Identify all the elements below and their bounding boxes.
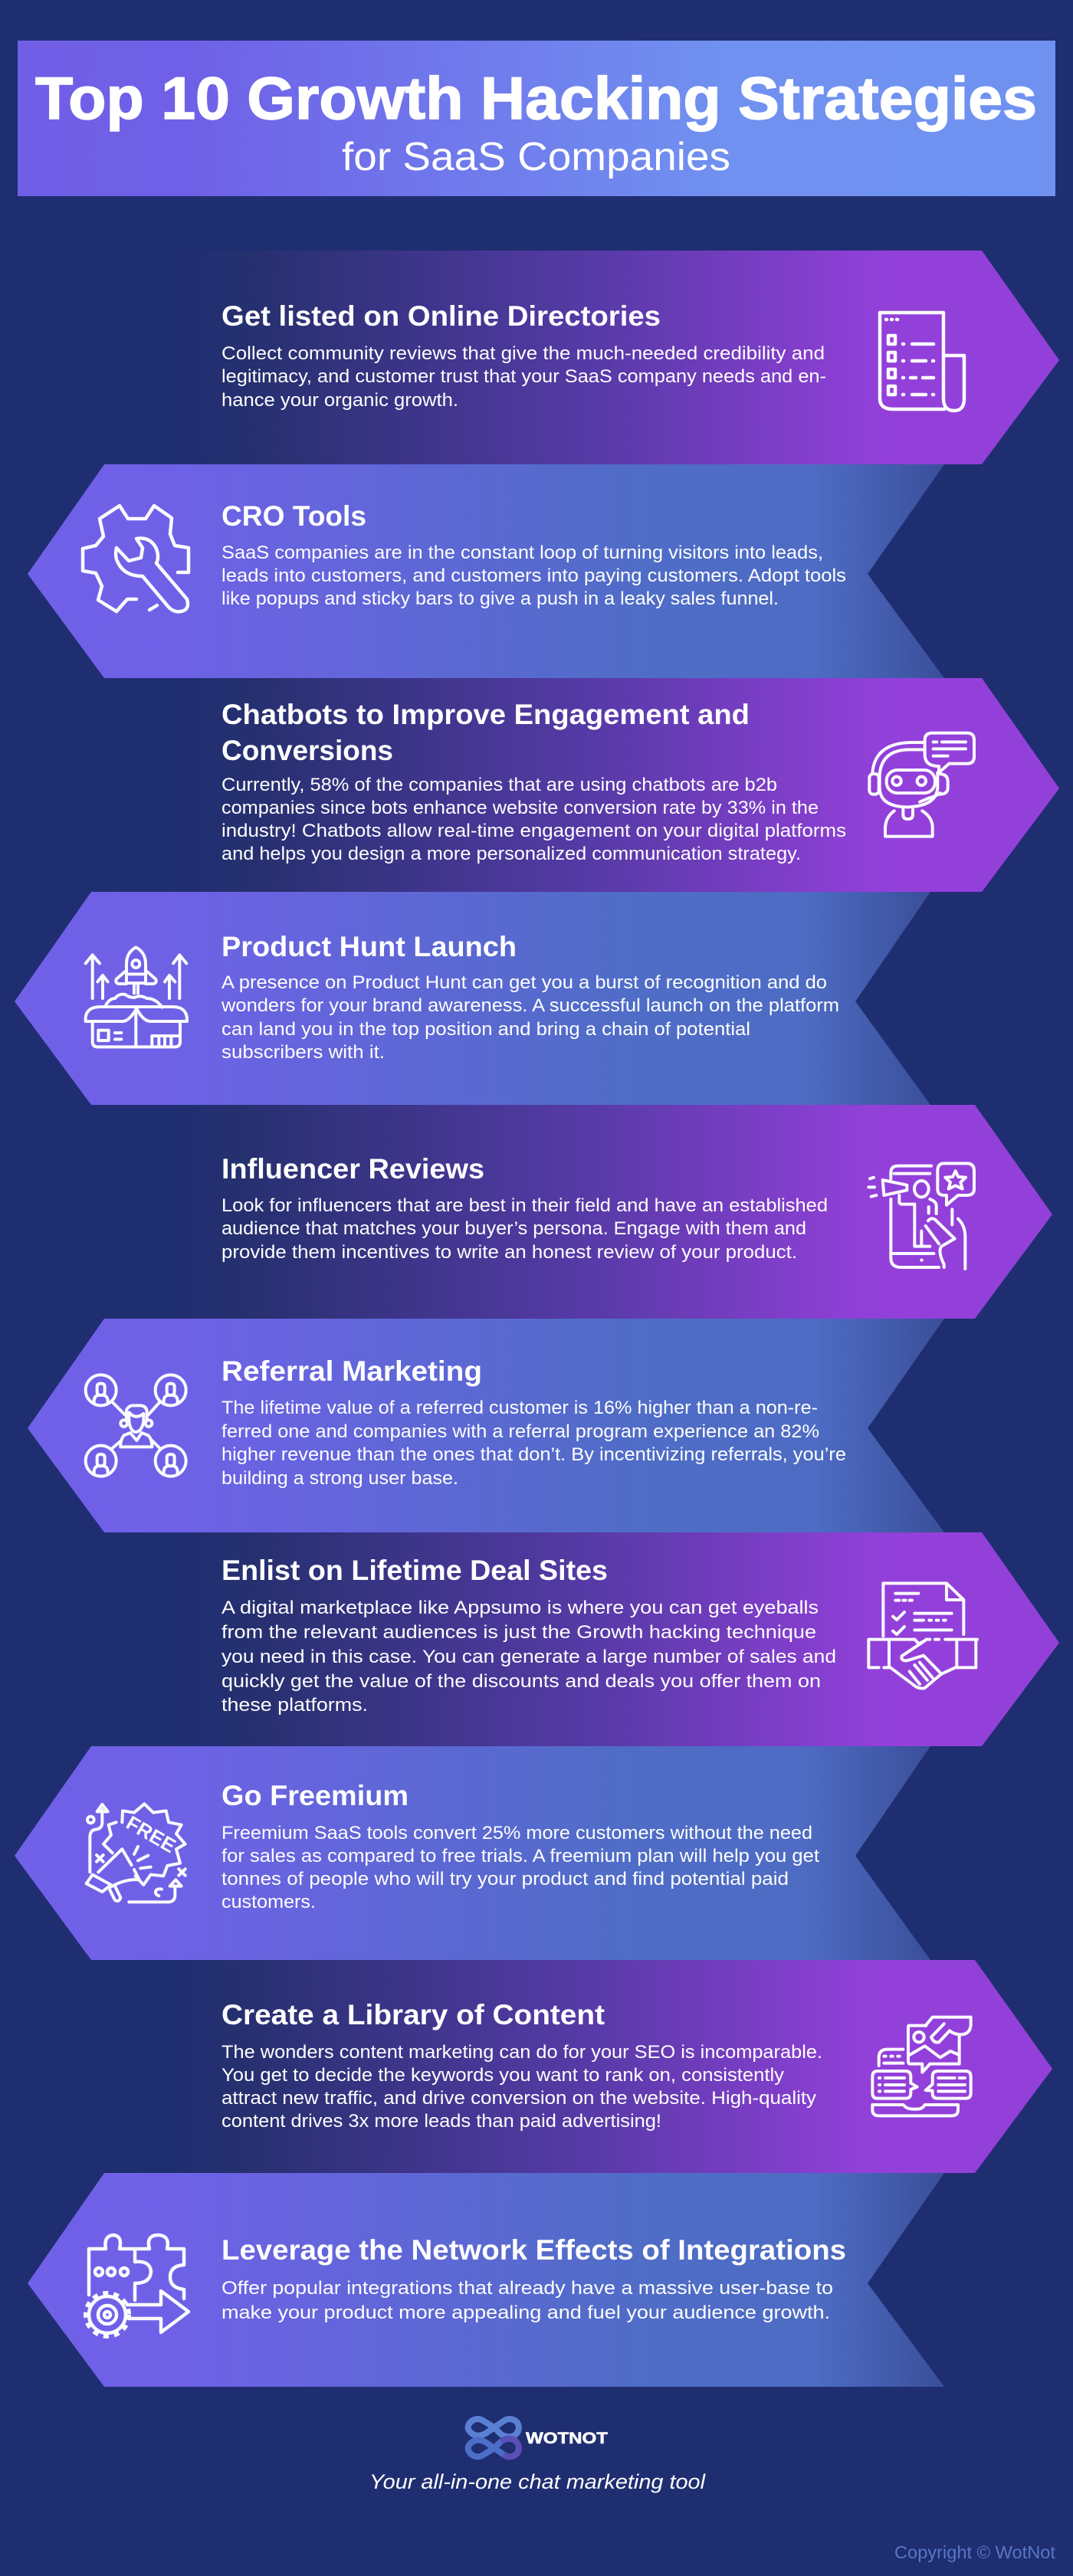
heading: Chatbots to Improve Engagement and <box>221 699 750 730</box>
tagline: Your all-in-one chat marketing tool <box>369 2470 706 2493</box>
body text <box>221 1195 828 1263</box>
body text: ferred one and companies with a referral program experience an 82% <box>221 1421 819 1442</box>
body text: can land you in the top position and bring a chain of potential <box>221 1019 750 1040</box>
heading: Go Freemium <box>221 1780 409 1811</box>
panel: Leverage the Network Effects of Integrations <box>28 2173 944 2387</box>
body text: quickly get the value of the discounts and deals you offer them on <box>221 1671 821 1692</box>
body text: these platforms. <box>221 1695 368 1716</box>
body text: Freemium SaaS tools convert 25% more customers without the need <box>221 1823 812 1844</box>
body text <box>221 1398 846 1489</box>
header banner <box>18 41 1055 196</box>
body text: for sales as compared to free trials. A freemium plan will help you get <box>221 1846 819 1866</box>
body text <box>221 2042 822 2132</box>
body text: you need in this case. You can generate a large number of sales and <box>221 1647 836 1667</box>
body text: Collect community reviews that give the much-needed credibility and <box>221 343 825 364</box>
body text: hance your organic growth. <box>221 390 458 411</box>
icon: contract handshake <box>868 1583 977 1689</box>
body text: building a strong user base. <box>221 1468 458 1489</box>
heading: Conversions <box>221 735 393 766</box>
panel: Product Hunt Launch <box>15 892 930 1105</box>
body text: legitimacy, and customer trust that your SaaS company needs and en- <box>221 366 826 387</box>
icon: free megaphone: FREE <box>123 1811 180 1857</box>
body text: like popups and sticky bars to give a push in a leaky sales funnel. <box>221 588 779 609</box>
body text: tonnes of people who will try your product and find potential paid <box>221 1869 789 1889</box>
icon: puzzle, gear and arrow <box>86 2235 189 2336</box>
body text: make your product more appealing and fuel your audience growth. <box>221 2302 830 2323</box>
body text <box>221 542 846 609</box>
heading: Product Hunt Launch <box>221 931 517 962</box>
body text <box>221 2278 833 2323</box>
panel: Go Freemium <box>15 1746 930 1960</box>
body text: The lifetime value of a referred customer is 16% higher than a non-re- <box>221 1398 818 1418</box>
body text: Look for influencers that are best in their field and have an established <box>221 1195 828 1216</box>
heading: Leverage the Network Effects of Integrations <box>221 2234 846 2266</box>
panel: Influencer Reviews <box>172 1105 1052 1319</box>
panel: Referral Marketing <box>28 1319 944 1532</box>
logo: WotNot <box>468 2419 608 2456</box>
heading: Create a Library of Content <box>221 1999 605 2030</box>
body text: leads into customers, and customers into paying customers. Adopt tools <box>221 565 846 586</box>
heading <box>221 699 750 766</box>
title: Top 10 Growth Hacking Strategies <box>35 64 1037 132</box>
icon: chatbot <box>869 733 974 837</box>
panel: Get listed on Online Directories <box>182 251 1059 464</box>
body text: customers. <box>221 1892 316 1912</box>
body text: provide them incentives to write an honest review of your product. <box>221 1242 797 1263</box>
icon: content library <box>872 2017 971 2116</box>
body text: Offer popular integrations that already have a massive user-base to <box>221 2278 833 2299</box>
body text: and helps you design a more personalized communication strategy. <box>221 844 801 864</box>
body text: The wonders content marketing can do for your SEO is incomparable. <box>221 2042 822 2063</box>
logo: WotNot: WOTNOT <box>526 2430 608 2447</box>
body text: You get to decide the keywords you want to rank on, consistently <box>221 2065 784 2086</box>
body text: companies since bots enhance website conversion rate by 33% in the <box>221 798 819 818</box>
body text <box>221 1598 836 1716</box>
panel: Chatbots <box>182 678 1059 892</box>
heading: Get listed on Online Directories <box>221 300 661 332</box>
body text <box>221 343 826 411</box>
heading: Referral Marketing <box>221 1355 482 1387</box>
icon: directory list <box>880 313 964 411</box>
panel: CRO Tools <box>28 464 944 678</box>
heading: Enlist on Lifetime Deal Sites <box>221 1555 608 1586</box>
panel: Enlist on Lifetime Deal Sites <box>182 1532 1059 1746</box>
body text: Currently, 58% of the companies that are using chatbots are b2b <box>221 775 777 795</box>
body text <box>221 1823 819 1912</box>
icon: referral network <box>86 1375 186 1476</box>
panel: Create a Library of Content <box>172 1960 1052 2173</box>
body text: attract new traffic, and drive conversion on the website. High-quality <box>221 2088 816 2109</box>
body text: from the relevant audiences is just the Growth hacking technique <box>221 1622 816 1643</box>
icon: free megaphone <box>87 1804 185 1902</box>
body text: A digital marketplace like Appsumo is where you can get eyeballs <box>221 1598 819 1618</box>
body text: industry! Chatbots allow real-time engagement on your digital platforms <box>221 821 846 841</box>
body text: content drives 3x more leads than paid advertising! <box>221 2111 661 2132</box>
subtitle: for SaaS Companies <box>342 135 730 179</box>
heading: Influencer Reviews <box>221 1153 484 1185</box>
heading: CRO Tools <box>221 500 366 532</box>
icon: gear and wrench <box>83 506 189 611</box>
body text <box>221 775 846 864</box>
body text: audience that matches your buyer’s persona. Engage with them and <box>221 1218 806 1239</box>
body text: A presence on Product Hunt can get you a burst of recognition and do <box>221 972 827 993</box>
copyright: Copyright © WotNot <box>894 2542 1056 2562</box>
body text <box>221 972 839 1063</box>
body text: wonders for your brand awareness. A successful launch on the platform <box>221 995 839 1016</box>
body text: SaaS companies are in the constant loop of turning visitors into leads, <box>221 542 823 563</box>
icon: influencer phone with megaphone <box>868 1163 974 1269</box>
body text: subscribers with it. <box>221 1042 385 1063</box>
body text: higher revenue than the ones that don’t. By incentivizing referrals, you’re <box>221 1444 846 1465</box>
icon: rocket launching from box <box>86 947 187 1047</box>
